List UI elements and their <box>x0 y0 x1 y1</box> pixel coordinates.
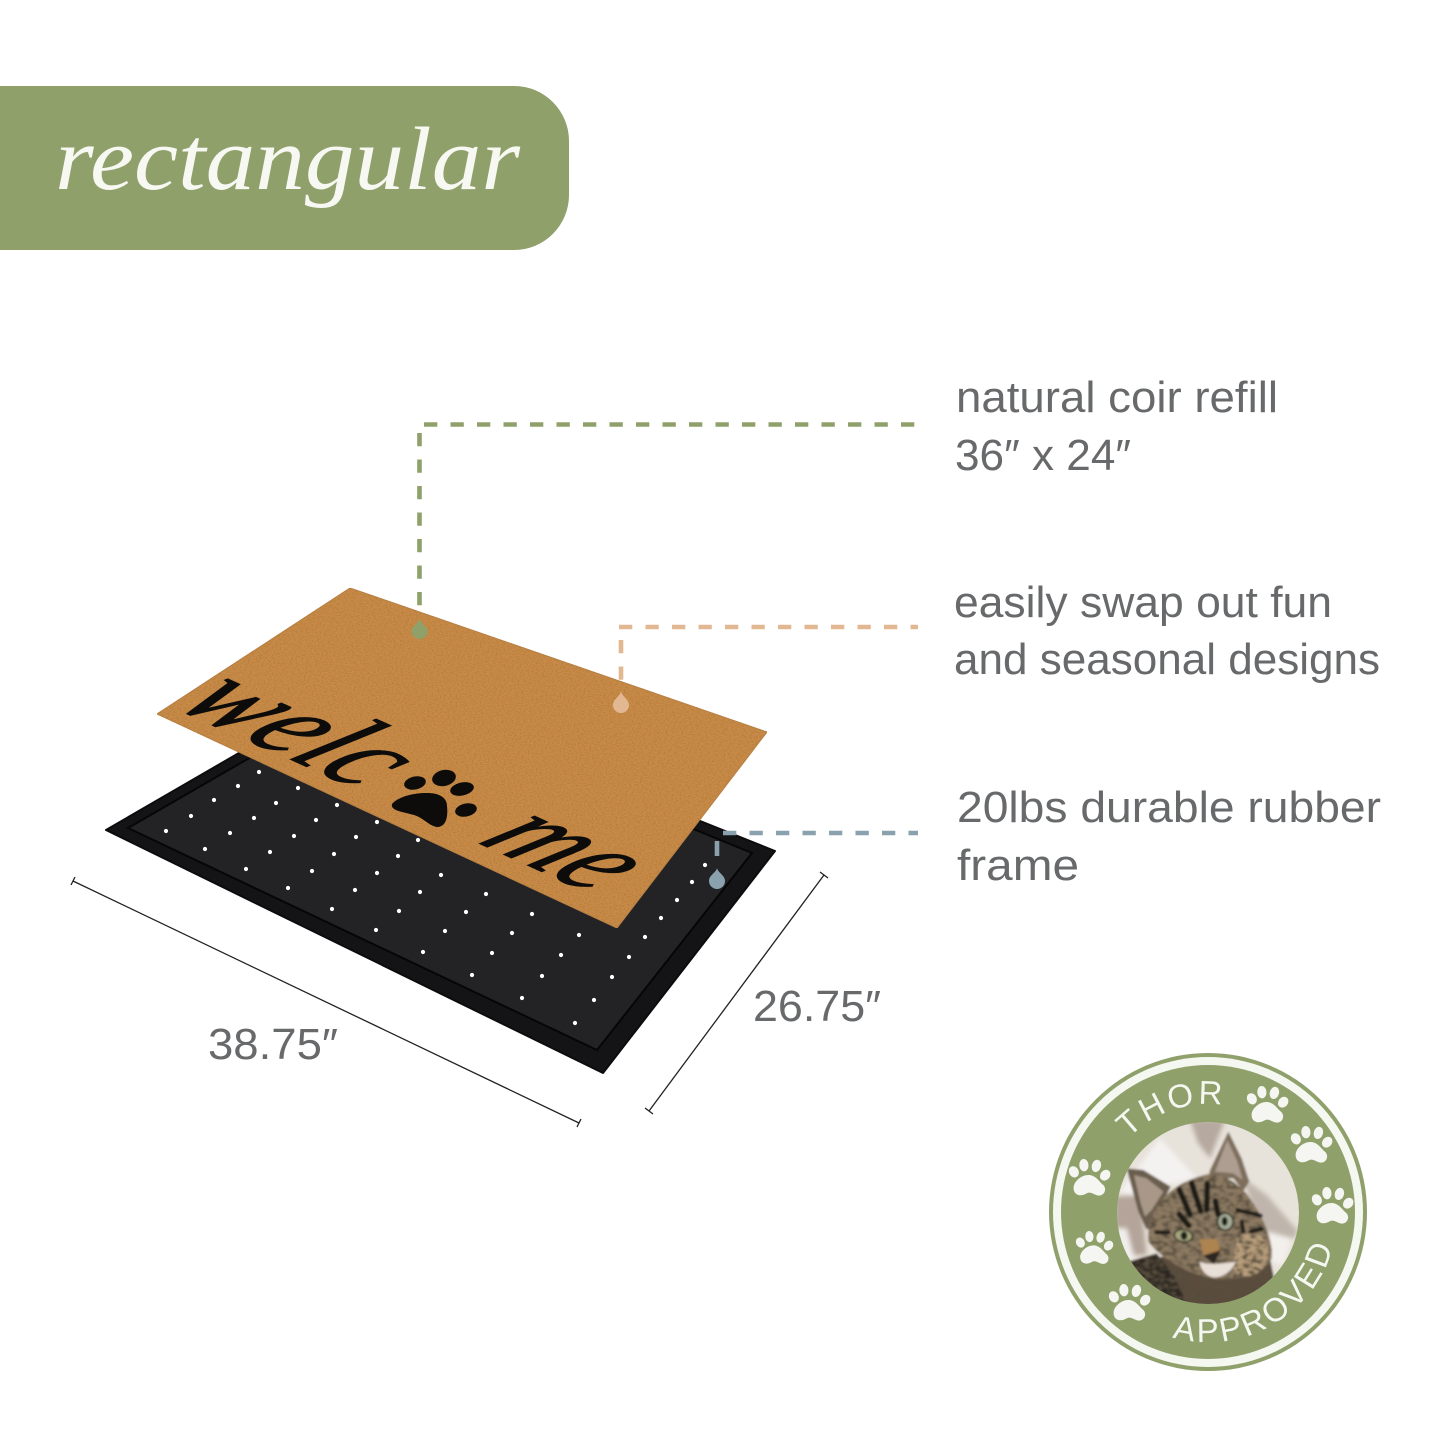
badge: Thor approved: THOR <box>1114 1081 1220 1132</box>
pin: tan <box>613 691 629 713</box>
dimension line: width <box>645 872 828 1114</box>
badge: Thor approved <box>1049 1053 1367 1371</box>
drainage hole dots <box>164 770 707 1025</box>
kitten face markings <box>1157 1183 1262 1232</box>
badge text: THOR <box>1129 1104 1240 1138</box>
callout leader: rubber frame <box>709 833 918 889</box>
callout text: natural coir refill: natural coir refill <box>956 373 1278 422</box>
badge text: APPROVED <box>1172 1239 1335 1342</box>
callout text: natural coir refill: 36″ x 24″ <box>955 431 1131 480</box>
callout text: rubber frame <box>957 783 1381 890</box>
callout text: easily swap out <box>954 578 1380 684</box>
coir welcome mat <box>146 588 767 928</box>
callout text: rubber frame: 20lbs durable rubber <box>957 783 1381 832</box>
pin: green <box>412 618 428 639</box>
callout text: rubber frame: frame <box>957 841 1079 890</box>
kitten photo <box>1117 1122 1299 1304</box>
callout text: natural coir refill <box>955 373 1278 480</box>
kitten ears <box>1127 1132 1249 1230</box>
badge: Thor approved: APPROVED <box>1172 1244 1330 1342</box>
callout leader: coir refill <box>412 424 916 639</box>
dimension label: 26.75: 26.75″ <box>753 982 881 1031</box>
kitten muzzle <box>1199 1239 1236 1277</box>
kitten body <box>1130 1252 1275 1304</box>
kitten head <box>1148 1174 1272 1279</box>
kitten eyes <box>1173 1212 1234 1244</box>
kitten nose <box>1203 1250 1221 1264</box>
pin: blue <box>709 868 725 889</box>
title banner: rectangular: rectangular <box>55 110 521 209</box>
title banner: rectangular <box>0 86 569 250</box>
callout text: easily swap out: easily swap out fun <box>954 578 1332 627</box>
paw prints <box>1064 1082 1357 1324</box>
mat lettering: welc: welc <box>146 651 460 804</box>
callout text: easily swap out: and seasonal designs <box>954 635 1380 684</box>
mat lettering: me: me <box>450 787 692 907</box>
mat lettering: paw print <box>392 768 478 827</box>
callout leader: swap designs <box>613 627 918 713</box>
dimension label: 38.75: 38.75″ <box>208 1020 338 1069</box>
rubber frame with drainage holes <box>106 684 775 1073</box>
dimension line: length <box>71 877 581 1127</box>
